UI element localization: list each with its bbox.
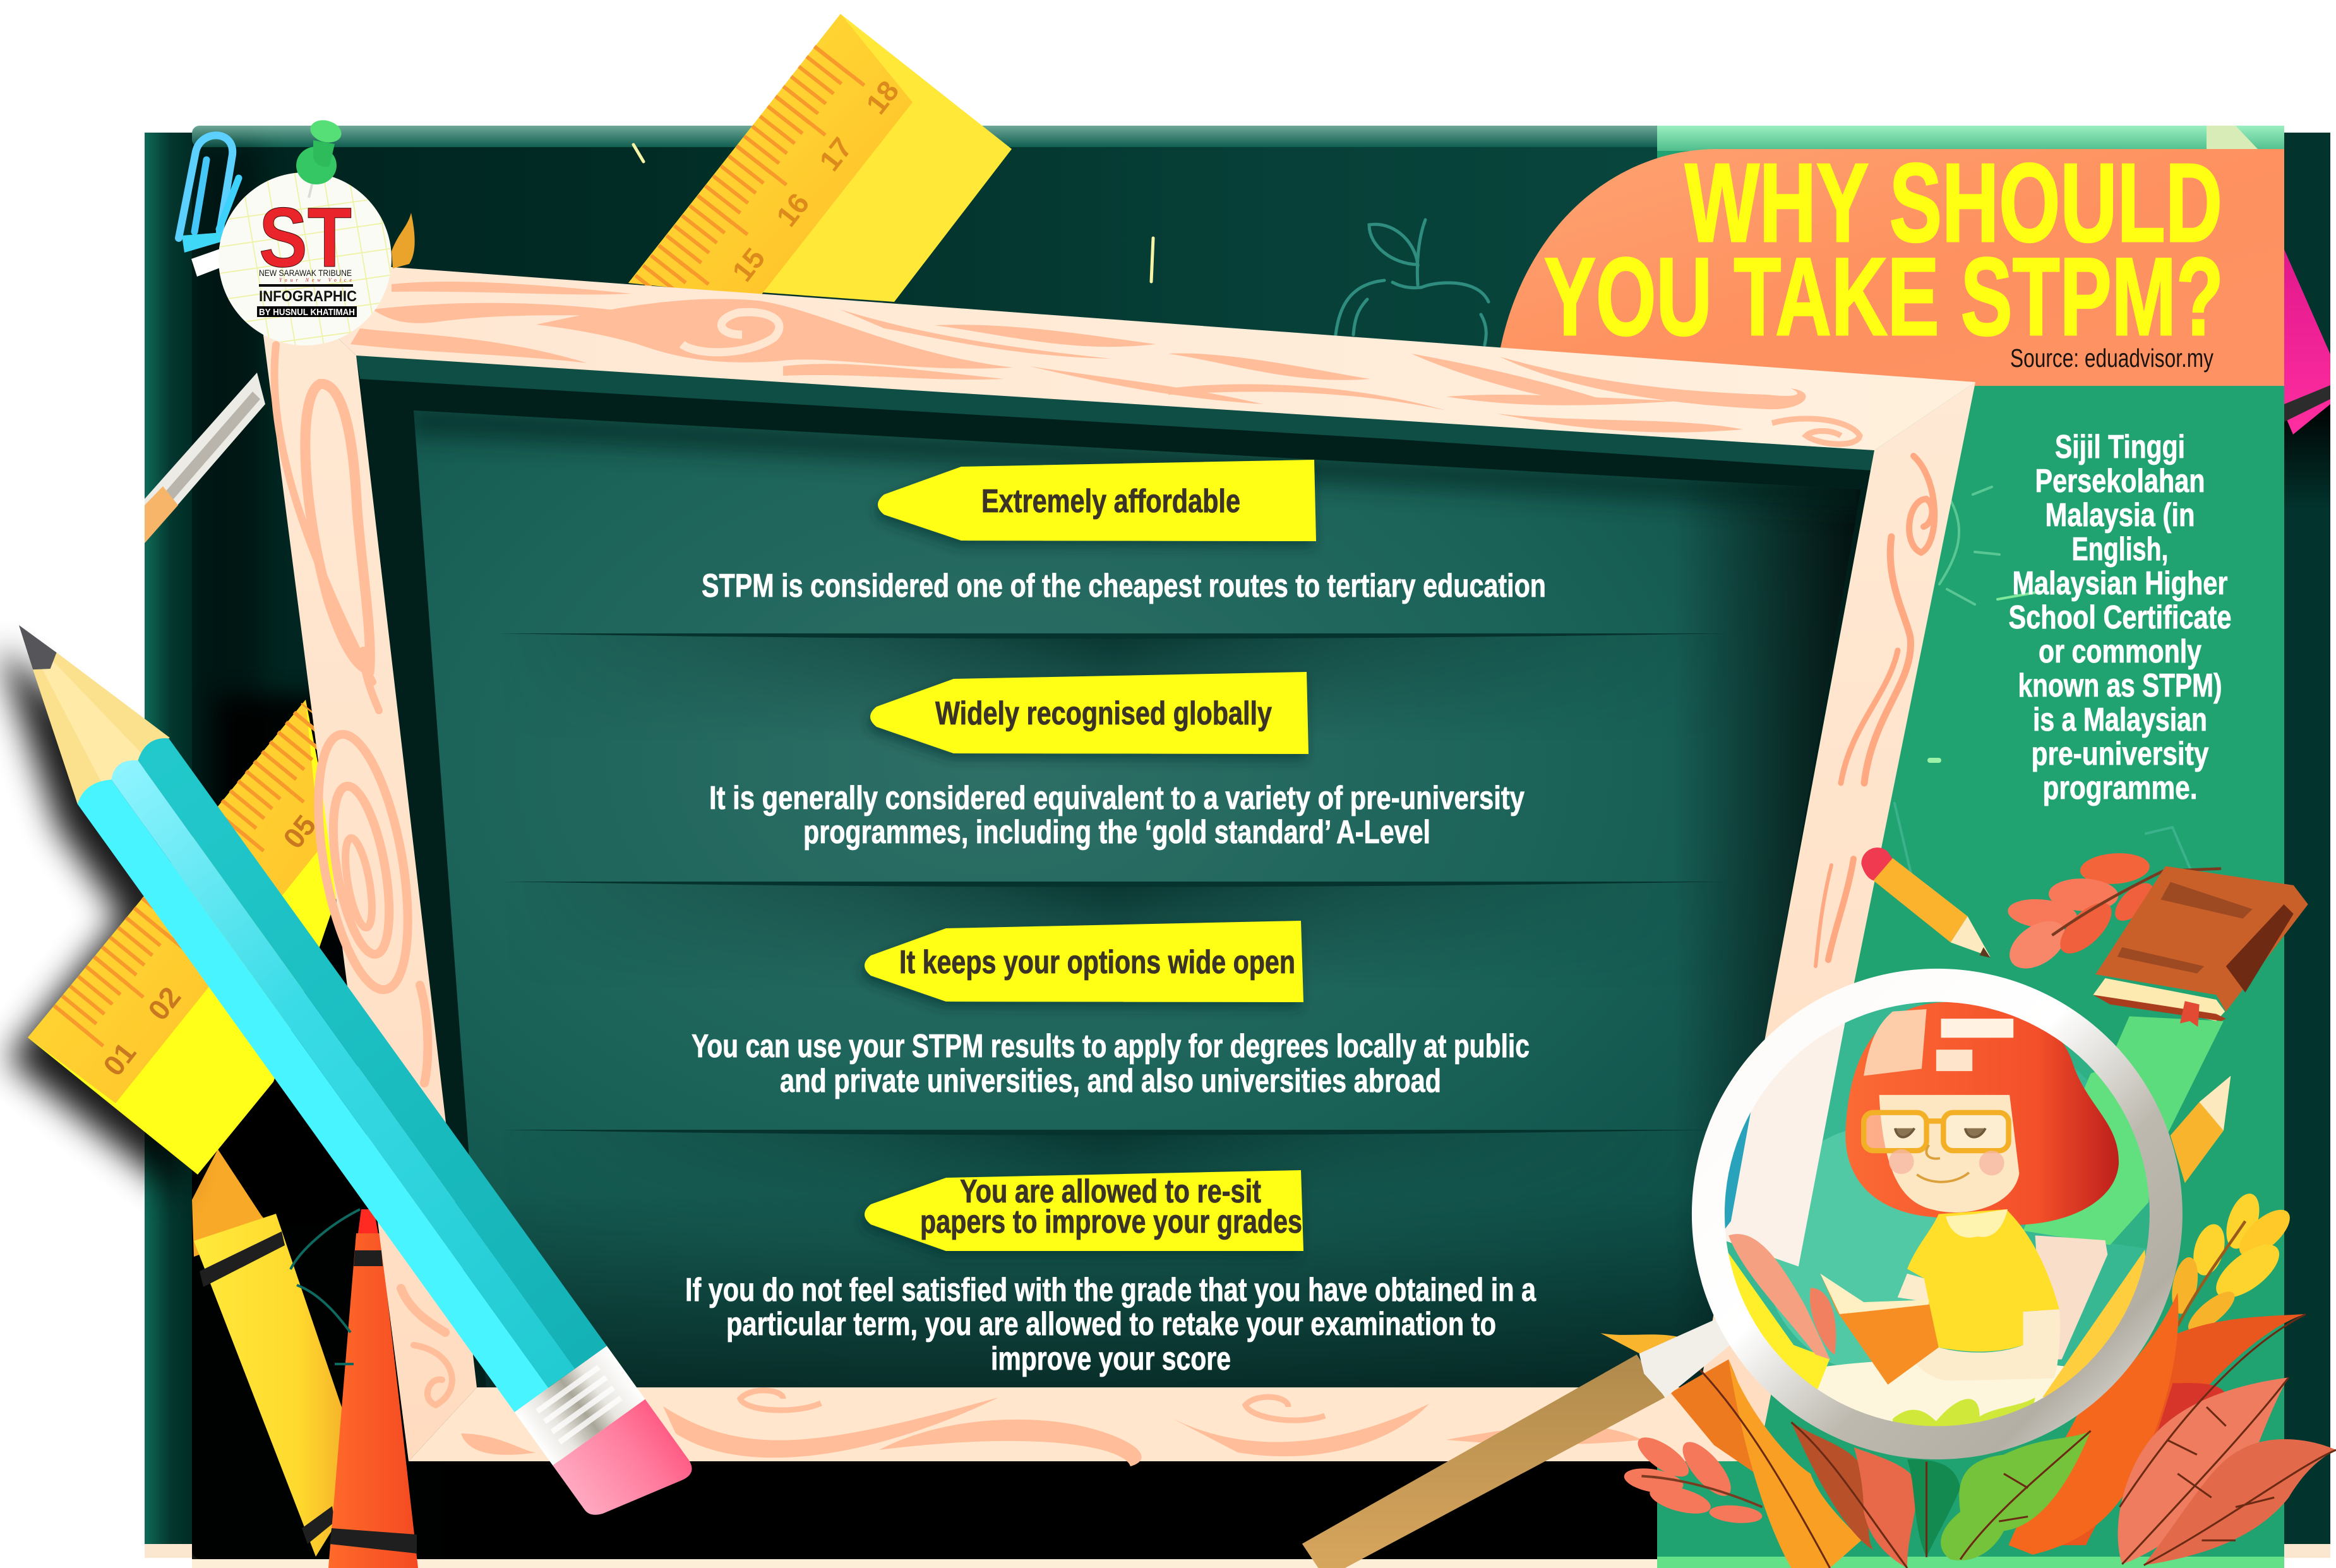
- pink bottom leaf: [1854, 1447, 1917, 1568]
- section 2 body: It is generally considered equivalent to a variety of pre-university: [709, 780, 1524, 817]
- label tag 3: [865, 921, 1303, 1002]
- magnifier handle: [1302, 1319, 1734, 1568]
- pink right leaf: [2118, 1377, 2289, 1564]
- dark orange right leaf: [2023, 1314, 2306, 1545]
- chalk doodles on green panel: [1895, 487, 2191, 884]
- collar: [1946, 1209, 2008, 1238]
- small yellow pencil right: [2128, 1076, 2231, 1214]
- publisher name: NEW SARAWAK TRIBUNE: [259, 268, 352, 278]
- label tag 1: [878, 460, 1316, 541]
- magnifier ring: [1692, 969, 2183, 1459]
- section 3: [692, 921, 1530, 1099]
- label tag 4: [865, 1170, 1303, 1251]
- right intro text: Sijil Tinggi: [2055, 429, 2185, 465]
- lens scene: [1719, 997, 2163, 1445]
- right intro text: Persekolahan: [2035, 463, 2205, 500]
- arms: [1912, 1309, 2060, 1381]
- big blue pencil with eraser: [0, 592, 697, 1537]
- label tag 2: [870, 672, 1309, 754]
- section 1 body: STPM is considered one of the cheapest routes to tertiary education: [702, 568, 1546, 604]
- chalk apple sketch: [1336, 220, 1488, 345]
- closed eyes: [1895, 1128, 1986, 1137]
- left frame grain: [274, 345, 452, 1405]
- section divider folds: [499, 633, 1727, 1237]
- red bottom leaf: [1791, 1422, 1873, 1550]
- label 4 text: [920, 1173, 1302, 1240]
- ST logo letters: ST: [259, 191, 352, 285]
- section 4 body: If you do not feel satisfied with the grade that you have obtained in a: [685, 1272, 1536, 1308]
- right intro text: or commonly: [2039, 633, 2201, 670]
- right-side illustrations: [1302, 847, 2336, 1568]
- pink object right edge: [2284, 249, 2330, 512]
- infographic label: INFOGRAPHIC: [259, 288, 357, 305]
- girl glasses: [1864, 1113, 2009, 1151]
- orange center-right leaf: [2009, 1293, 2178, 1555]
- bottom frame grain: [461, 1397, 1642, 1466]
- label 4 text: You are allowed to re-sit: [960, 1173, 1261, 1210]
- author name: BY HUSNUL KHATIMAH: [259, 307, 355, 318]
- brown far right leaf: [2144, 1439, 2336, 1565]
- section 2: [709, 672, 1524, 851]
- front chalkboard: [192, 126, 1657, 1559]
- small yellow pencil: [1861, 847, 1991, 958]
- label 3 text: It keeps your options wide open: [899, 944, 1295, 981]
- chalk dashes: [633, 145, 1153, 282]
- dark green leaf: [1907, 1459, 1960, 1557]
- green pencil behind lens: [2037, 1016, 2224, 1250]
- source credit: Source: eduadvisor.my: [2010, 344, 2213, 373]
- dark red patch: [2148, 1383, 2227, 1459]
- large autumn leaves: [1600, 1293, 2336, 1568]
- section 4 body: improve your score: [991, 1341, 1231, 1377]
- girl face: [1879, 1095, 2019, 1212]
- red crayon: [328, 1209, 418, 1568]
- left yellow ruler: [28, 700, 341, 1175]
- wooden frame: [253, 257, 1975, 1466]
- yellow crayon: [192, 1149, 344, 1557]
- bottom cream strip: [192, 1557, 2284, 1568]
- top frame grain: [350, 282, 1806, 433]
- right green panel: [1657, 126, 2284, 1568]
- right intro text: [2008, 429, 2232, 806]
- green push pin: [296, 117, 344, 198]
- ruler number 18: 18: [860, 75, 905, 120]
- light green leaf: [1941, 1431, 2091, 1560]
- title text: [1544, 140, 2224, 359]
- section 3 body: You can use your STPM results to apply for degrees locally at public: [692, 1028, 1530, 1065]
- big orange left leaf: [1728, 1360, 1861, 1568]
- section 1: [702, 460, 1546, 604]
- label 2 text: Widely recognised globally: [935, 695, 1272, 732]
- section 2 body: programmes, including the ‘gold standard’ A-Level: [803, 814, 1430, 851]
- ruler number 17: 17: [813, 131, 858, 177]
- section 4: [685, 1170, 1536, 1377]
- label 4 text: papers to improve your grades: [920, 1204, 1302, 1240]
- small pink branch: [1622, 1430, 1763, 1525]
- ruler number 05: 05: [277, 809, 322, 854]
- orange leaf branch: [2001, 851, 2221, 978]
- section 2 body: [709, 780, 1524, 851]
- top yellow ruler: [628, 14, 1012, 302]
- feather behind badge: [392, 213, 415, 268]
- reading book: [1820, 1274, 1939, 1385]
- dark orange left leaf: [1670, 1360, 1777, 1488]
- yellow leaf tip: [1600, 1333, 1682, 1355]
- ruler number 01: 01: [97, 1036, 142, 1082]
- right intro text: Malaysia (in: [2045, 497, 2195, 534]
- ruler number 16: 16: [770, 187, 815, 232]
- title orange block: [1494, 149, 2284, 404]
- author box: [257, 306, 357, 317]
- smile and nose: [1917, 1145, 1969, 1182]
- publisher slogan: Your New Voice: [279, 277, 352, 283]
- top frame swirls: [682, 312, 779, 352]
- recessed blackboard interior: [356, 356, 1874, 1387]
- right intro text: Malaysian Higher: [2012, 565, 2228, 602]
- shirt: [1907, 1209, 2059, 1351]
- section 3 body: and private universities, and also universities abroad: [780, 1063, 1441, 1099]
- vein lines: [1690, 1314, 2336, 1568]
- right intro text: School Certificate: [2008, 599, 2232, 636]
- soft shadow behind pencil and ruler: [0, 645, 195, 1195]
- blush: [1889, 1149, 1914, 1174]
- right frame grain: [1816, 456, 1934, 966]
- section 3 body: [692, 1028, 1530, 1099]
- section 4 body: [685, 1272, 1536, 1377]
- right intro text: English,: [2071, 531, 2169, 568]
- brown book: [2093, 866, 2308, 1027]
- right intro text: is a Malaysian: [2033, 702, 2207, 738]
- chalk scribble near crayons: [291, 1209, 360, 1364]
- right intro text: known as STPM): [2018, 667, 2222, 704]
- ruler number 02: 02: [141, 981, 187, 1026]
- newspaper logo badge: [219, 173, 392, 345]
- ruler number 15: 15: [726, 242, 771, 287]
- right intro text: pre-university: [2031, 736, 2209, 772]
- white pencil stub behind frame: [145, 373, 265, 543]
- paperclip: [179, 135, 239, 238]
- label 1 text: Extremely affordable: [981, 483, 1240, 520]
- yellow leaf branch: [2168, 1190, 2297, 1338]
- section 4 body: particular term, you are allowed to retake your examination to: [726, 1306, 1496, 1343]
- girl hair: [1845, 1002, 2119, 1225]
- paperclip tape: [182, 232, 255, 277]
- right intro text: programme.: [2042, 770, 2198, 806]
